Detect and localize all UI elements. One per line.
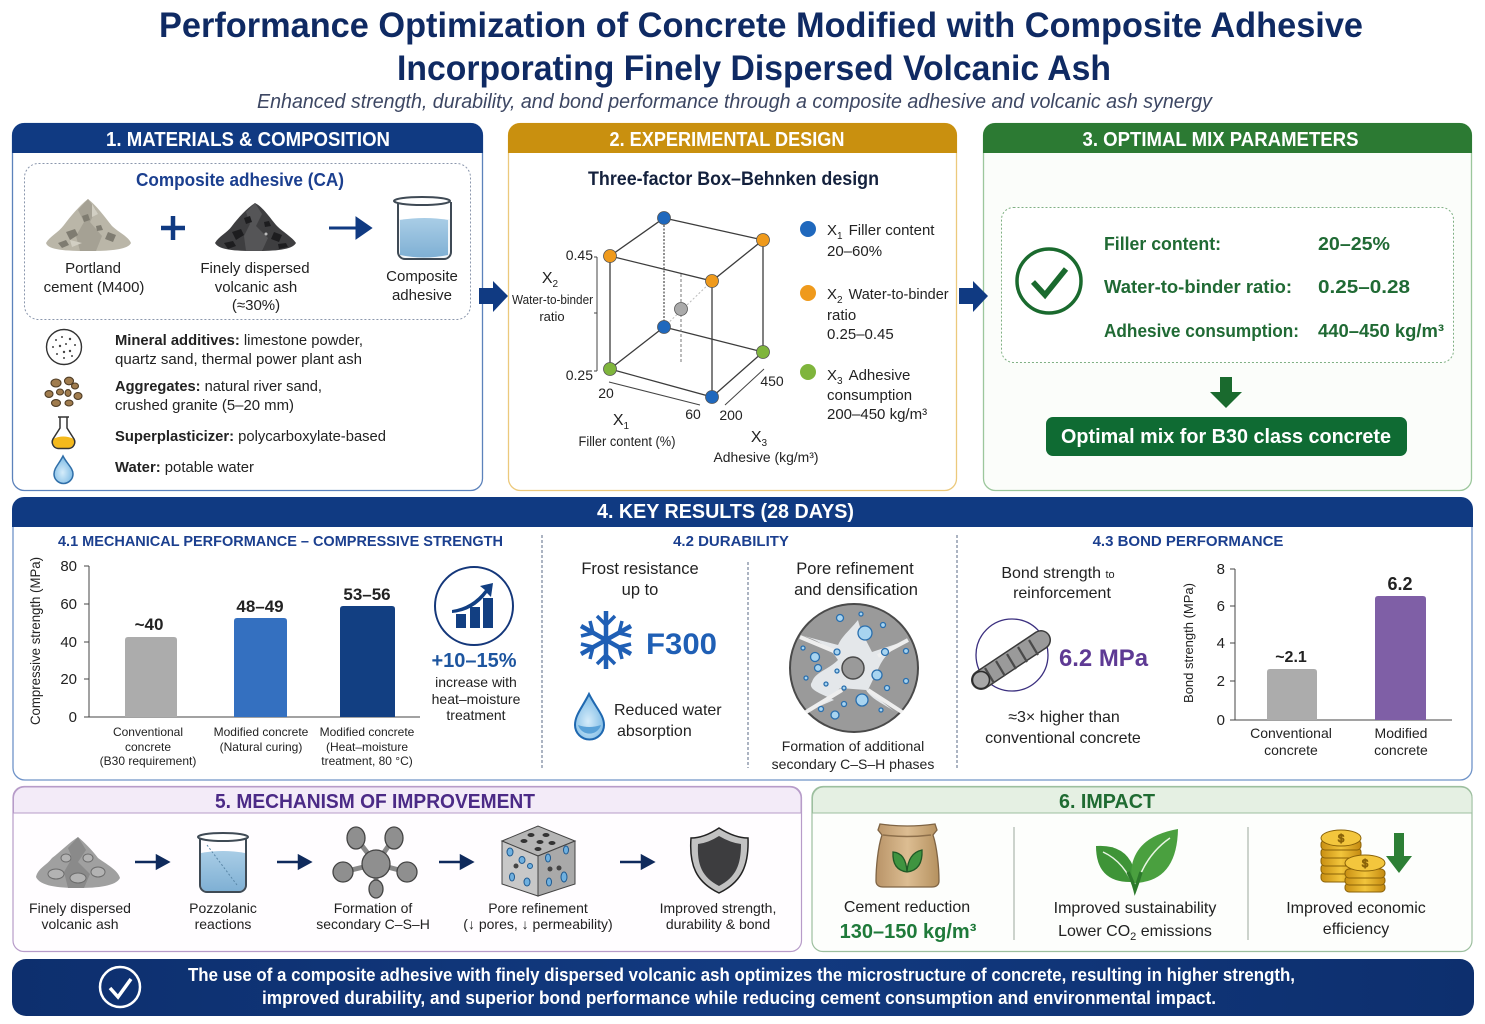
text: 3x higher — [985, 709, 1141, 747]
impact: economic efficiency: Improved economic — [1286, 900, 1426, 917]
text: mineral additives: quartz sand, thermal power plant ash — [115, 351, 362, 368]
bar chart: compressive strength: 53–56 — [343, 585, 391, 604]
composite adhesive box: (≈30%) — [232, 297, 280, 314]
title — [159, 6, 1363, 88]
conclusion banner: The use of a composite adhesive with finely dispersed volcanic ash optimizes the microstructure of concrete, resulting in higher strength, — [188, 965, 1295, 985]
bar chart: compressive strength: (B30 requirement) — [100, 754, 196, 768]
legend: factors — [800, 221, 949, 423]
step: volcanic ash — [29, 837, 131, 932]
bar chart: bond strength: 0 — [1217, 712, 1225, 729]
icon: mineral additives — [46, 330, 82, 364]
parameters box: Water-to-binder ratio: — [1104, 277, 1292, 297]
bar chart: compressive strength: 60 — [60, 596, 77, 613]
composite adhesive box: volcanic ash — [215, 279, 297, 296]
icon: plus — [161, 216, 185, 240]
bar chart: bond strength: Conventional — [1250, 725, 1332, 741]
icon: beaker — [394, 197, 451, 259]
impact: sustainability: 2 — [1130, 931, 1136, 943]
cube diagram: 0.45 — [566, 247, 593, 263]
heading: impact: 6. IMPACT — [1059, 791, 1155, 813]
heading: mechanism — [14, 787, 801, 813]
bar chart: bond strength: Modified — [1375, 725, 1427, 741]
impact: economic efficiency — [1286, 830, 1426, 938]
bar chart: bond strength: 6.2 — [1387, 574, 1413, 594]
bar chart: compressive strength — [27, 557, 420, 768]
legend: factors: 0.25–0.45 — [827, 326, 894, 343]
metric: 6.2 MPa: 6.2 MPa — [1059, 645, 1149, 672]
bar chart: bond strength: 6 — [1217, 598, 1225, 615]
step: pozzolanic reactions — [189, 833, 257, 932]
text: frost resistance: Frost resistance — [581, 560, 699, 578]
legend: factors: Filler content — [849, 222, 935, 239]
step: shield: Improved strength, — [660, 900, 776, 916]
heading: optimal mix: 3. OPTIMAL MIX PARAMETERS — [1082, 129, 1358, 151]
callout: optimal mix: Optimal mix for B30 class concrete — [1061, 426, 1391, 448]
cube diagram: 0.25 — [566, 367, 593, 383]
text: aggregates: crushed granite (5–20 mm) — [115, 397, 294, 414]
composite adhesive box: adhesive — [392, 287, 452, 304]
text: pore refinement — [794, 560, 918, 599]
impact: sustainability — [1054, 829, 1216, 943]
bar chart: compressive strength: Compressive strength (MPa) — [27, 557, 43, 725]
step: shield: durability & bond — [666, 916, 770, 932]
callout: increase: increase with — [435, 674, 517, 690]
text: 3x higher: conventional concrete — [985, 730, 1141, 747]
step: C-S-H molecule: Formation of — [334, 900, 412, 916]
section: durability: 4.2 DURABILITY — [673, 533, 789, 550]
icon: conclusion check — [100, 967, 140, 1007]
impact: sustainability: Improved sustainability — [1054, 900, 1216, 917]
heading: materials — [12, 123, 483, 153]
bar chart: bond strength — [1181, 561, 1452, 758]
legend: factors: Water-to-binder — [849, 286, 949, 303]
callout: increase: treatment — [446, 707, 506, 723]
step: porous cube: (↓ pores, ↓ permeability) — [463, 916, 613, 932]
icon: rebar — [972, 619, 1048, 691]
arrow — [135, 856, 168, 868]
cube diagram: Adhesive (kg/m³) — [714, 450, 818, 465]
cube diagram: X — [751, 429, 762, 446]
step: C-S-H molecule — [316, 827, 430, 932]
heading: design — [508, 123, 957, 153]
bar chart: bond strength: ~2.1 — [1275, 649, 1307, 666]
heading: impact — [812, 787, 1472, 813]
title: Performance Optimization of Concrete Modified with Composite Adhesive — [159, 6, 1363, 45]
icon: check mark — [1017, 249, 1081, 313]
text: C-S-H phases: secondary C–S–H phases — [772, 756, 934, 772]
subheading: box-behnken: Three-factor Box–Behnken design — [588, 169, 879, 190]
heading: design: 2. EXPERIMENTAL DESIGN — [610, 129, 844, 151]
text: aggregates: Aggregates: natural river sand, — [115, 378, 322, 395]
text: mineral additives: Mineral additives: limestone powder, — [115, 332, 363, 349]
text: C-S-H phases — [772, 738, 934, 772]
cube diagram: 1 — [624, 421, 630, 432]
cube diagram: 20 — [598, 385, 614, 401]
parameters box: Filler content: — [1104, 234, 1221, 254]
arrow — [439, 856, 472, 868]
text: 3x higher: ≈3× higher than — [1008, 709, 1120, 726]
text: aggregates — [115, 378, 322, 414]
composite adhesive box: Finely dispersed — [200, 260, 310, 277]
impact: cement reduction — [840, 824, 977, 943]
bar chart: compressive strength: (Heat–moisture — [326, 740, 408, 754]
arrow: design to optimal mix — [959, 281, 988, 312]
cube diagram: 200 — [719, 407, 743, 423]
step: pozzolanic reactions: reactions — [195, 916, 251, 932]
legend: factors: ratio — [827, 307, 856, 324]
step: pozzolanic reactions: Pozzolanic — [189, 900, 257, 916]
bar chart: bond strength: 8 — [1217, 561, 1225, 578]
bar chart: compressive strength: (Natural curing) — [220, 740, 302, 754]
impact: sustainability: Lower CO — [1058, 923, 1130, 940]
step: volcanic ash: volcanic ash — [41, 916, 119, 932]
cube diagram: Water-to-binder — [512, 292, 594, 307]
bar chart: bond strength: Bond strength (MPa) — [1181, 583, 1196, 703]
bar chart: compressive strength: Modified concrete — [320, 725, 415, 739]
impact: cement reduction: 130–150 kg/m³ — [840, 921, 977, 943]
icon: leaves — [1096, 829, 1178, 890]
parameters box: Adhesive consumption: — [1104, 321, 1299, 341]
composite adhesive box: Composite adhesive (CA) — [136, 170, 344, 190]
text: bond strength — [1001, 565, 1115, 602]
text: water: Water: potable water — [115, 459, 254, 476]
section: durability — [575, 533, 934, 772]
bar chart: compressive strength: 0 — [69, 709, 77, 726]
composite adhesive box — [24, 164, 470, 320]
text: bond strength: reinforcement — [1013, 585, 1111, 602]
section: bond performance: 4.3 BOND PERFORMANCE — [1093, 533, 1283, 550]
impact: cement reduction: Cement reduction — [844, 899, 970, 916]
heading: materials: 1. MATERIALS & COMPOSITION — [106, 129, 390, 151]
legend: factors: 3 — [837, 376, 843, 387]
parameters box: 440–450 kg/m³ — [1318, 321, 1444, 341]
cube diagram — [512, 212, 818, 465]
callout: increase — [431, 650, 521, 723]
text: reduced water absorption — [614, 702, 722, 740]
step: volcanic ash: Finely dispersed — [29, 900, 131, 916]
bar chart: compressive strength: 48–49 — [236, 597, 284, 616]
composite adhesive box: Portland — [65, 260, 121, 277]
icon: absorption drop — [575, 694, 604, 740]
legend: factors: 2 — [837, 295, 843, 306]
icon: growth chart — [435, 567, 513, 645]
arrow: materials to design — [479, 281, 508, 312]
icon: aggregates — [45, 377, 82, 406]
cube diagram: 3 — [762, 438, 768, 449]
callout: optimal mix — [1046, 417, 1407, 456]
text: mineral additives — [115, 332, 363, 368]
impact: sustainability: emissions — [1136, 923, 1212, 940]
text: pore refinement: and densification — [794, 581, 918, 599]
callout: increase: heat–moisture — [432, 691, 521, 707]
section: bond performance — [972, 533, 1452, 758]
panel: mechanism of improvement — [13, 786, 802, 952]
callout: increase: +10–15% — [431, 650, 517, 672]
legend: factors: X — [827, 222, 837, 239]
icon: microstructure — [790, 604, 918, 732]
cube diagram: 2 — [553, 279, 559, 290]
cube diagram: X — [542, 270, 553, 287]
icon: arrow — [329, 219, 370, 237]
icon: coins: $ — [1338, 833, 1344, 845]
parameters box — [1002, 208, 1454, 362]
text: bond strength: Bond strength to — [1001, 565, 1115, 582]
step: C-S-H molecule: secondary C–S–H — [316, 916, 430, 932]
legend: factors: Adhesive — [849, 367, 910, 384]
icon: cement pile — [46, 199, 131, 251]
bar chart: bond strength: 4 — [1217, 635, 1225, 652]
text: frost resistance — [581, 560, 699, 599]
cube diagram: X — [613, 412, 624, 429]
section: mechanical performance — [27, 533, 521, 768]
text: reduced water absorption: absorption — [617, 723, 692, 740]
heading: key results: 4. KEY RESULTS (28 DAYS) — [597, 501, 854, 523]
heading: mechanism: 5. MECHANISM OF IMPROVEMENT — [215, 791, 535, 813]
step: porous cube: Pore refinement — [488, 900, 588, 916]
legend: factors: 200–450 kg/m³ — [827, 406, 927, 423]
parameters box: 0.25–0.28 — [1318, 277, 1410, 297]
panel: key results — [12, 497, 1473, 780]
text: C-S-H phases: Formation of additional — [782, 738, 924, 754]
panel: optimal mix parameters — [983, 123, 1472, 490]
section: mechanical performance: 4.1 MECHANICAL PERFORMANCE – COMPRESSIVE STRENGTH — [58, 533, 503, 550]
parameters box: 20–25% — [1318, 234, 1390, 254]
bar chart: bond strength: 2 — [1217, 673, 1225, 690]
bar chart: compressive strength: Conventional — [113, 725, 183, 739]
text: reduced water absorption: Reduced water — [614, 702, 722, 719]
conclusion banner — [12, 959, 1474, 1016]
step: shield — [660, 828, 776, 932]
icon: down arrow — [1386, 833, 1412, 873]
heading: optimal mix — [983, 123, 1472, 153]
panel: experimental design — [508, 123, 957, 490]
panel: materials and composition — [12, 123, 483, 490]
metric: F300: F300 — [646, 628, 717, 661]
legend: factors: consumption — [827, 387, 912, 404]
icon: coins: $ — [1362, 858, 1368, 870]
text: frost resistance: up to — [622, 581, 658, 599]
bar chart: compressive strength: ~40 — [135, 615, 163, 634]
impact: economic efficiency: efficiency — [1323, 921, 1389, 938]
icon: superplasticizer flask — [52, 417, 75, 448]
icon: snowflake — [581, 611, 631, 669]
icon: coins — [1321, 830, 1385, 892]
title: Incorporating Finely Dispersed Volcanic Ash — [397, 49, 1111, 88]
icon: cement bag — [876, 824, 939, 887]
arrow: down to optimal mix — [1210, 377, 1242, 408]
bar chart: bond strength: concrete — [1374, 742, 1428, 758]
icon: water drop — [54, 456, 73, 484]
legend: factors: X — [827, 367, 837, 384]
bar chart: bond strength: concrete — [1264, 742, 1318, 758]
composite adhesive box: cement (M400) — [44, 279, 144, 296]
cube diagram: Filler content (%) — [578, 434, 676, 449]
cube diagram: ratio — [539, 309, 565, 324]
bar chart: compressive strength: Modified concrete — [214, 725, 309, 739]
bar chart: compressive strength: treatment, 80 °C) — [321, 754, 413, 768]
composite adhesive box: Composite — [386, 268, 458, 285]
panel: impact — [812, 786, 1472, 952]
heading: key results — [12, 497, 1473, 527]
arrow — [277, 856, 310, 868]
conclusion banner: improved durability, and superior bond performance while reducing cement consumption and environmental impact. — [262, 988, 1216, 1008]
legend: factors: 1 — [837, 231, 843, 242]
legend: factors: X — [827, 286, 837, 303]
bar chart: compressive strength: 20 — [60, 671, 77, 688]
text: pore refinement: Pore refinement — [796, 560, 914, 578]
bar chart: compressive strength: 80 — [60, 558, 77, 575]
arrow — [620, 856, 653, 868]
cube diagram: 60 — [685, 406, 701, 422]
icon: volcanic ash pile — [215, 203, 296, 251]
text: superplasticizer: Superplasticizer: polycarboxylate-based — [115, 428, 386, 445]
subtitle: Enhanced strength, durability, and bond performance through a composite adhesive and volcanic ash synergy — [257, 91, 1213, 113]
cube diagram: 450 — [760, 373, 784, 389]
bar chart: compressive strength: concrete — [125, 740, 171, 754]
bar chart: compressive strength: 40 — [60, 634, 77, 651]
step: porous cube — [463, 826, 613, 932]
legend: factors: 20–60% — [827, 243, 882, 260]
